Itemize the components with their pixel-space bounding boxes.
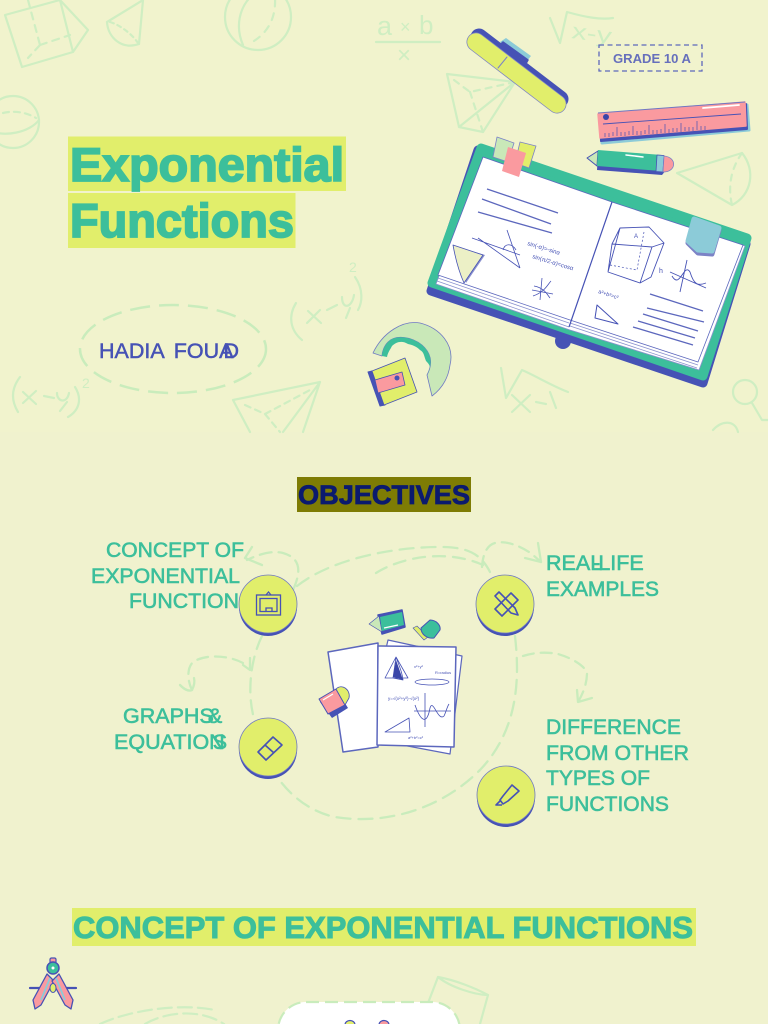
objective 3: graphs and equations	[114, 704, 297, 779]
icon: compass	[30, 958, 76, 1009]
center illustration: papers and supplies	[319, 610, 462, 754]
doodle formula labels: ×	[397, 42, 411, 69]
label: REAL-LIFE	[546, 551, 644, 575]
doodle formula labels: x-y	[570, 18, 613, 49]
badge	[239, 718, 297, 779]
label: CONCEPT OF	[106, 538, 244, 562]
doodle formula labels: b	[419, 10, 433, 40]
illustration: open book	[431, 137, 747, 383]
title: Functions	[70, 194, 294, 247]
dashed connectors	[180, 542, 592, 819]
doodle formula labels: 2	[82, 375, 90, 391]
title: Exponential	[70, 138, 344, 191]
triangle sketch: a²+b²=c²	[408, 735, 424, 740]
icon: marker	[476, 37, 560, 104]
icon: pencil	[587, 150, 674, 175]
front sheet	[377, 646, 456, 747]
label: EQUATIONS	[114, 730, 227, 754]
label: FUNCTIONS	[546, 792, 669, 816]
text lines	[478, 189, 704, 345]
triangle sketch	[385, 718, 424, 740]
icon: highlighter	[496, 785, 519, 805]
doodle formula labels: ×	[400, 17, 411, 37]
label: GRAPHS&	[123, 704, 222, 728]
label	[546, 715, 689, 816]
icon: eraser	[258, 737, 282, 760]
label: EXPONENTIAL	[91, 564, 240, 588]
prism sketch: a²+b²=c²	[597, 289, 619, 301]
objective 4: difference from other types of functions	[477, 715, 689, 827]
label	[114, 704, 227, 754]
next panel: white card	[278, 1002, 460, 1024]
label	[546, 551, 659, 601]
label	[91, 538, 244, 613]
grade label	[599, 45, 702, 71]
prism sketch: h	[659, 268, 663, 275]
doodle formula labels	[82, 10, 613, 391]
icon: ruler	[598, 102, 749, 143]
label: TYPES OF	[546, 766, 650, 790]
title	[68, 136, 346, 248]
shaving inner band	[382, 337, 431, 375]
back sheet	[365, 640, 462, 754]
geometry sketch	[472, 230, 574, 300]
cone sketch	[385, 657, 451, 701]
page stack	[436, 159, 745, 370]
grade label: GRADE 10 A	[613, 51, 692, 66]
author name badge: HADIA FOUAD	[99, 339, 239, 363]
icon: card figure tips	[345, 1020, 389, 1024]
pencil stub	[369, 610, 405, 634]
label: DIFFERENCE	[546, 715, 681, 739]
cone sketch: R=radius	[435, 670, 451, 675]
icon: blackboard	[256, 592, 280, 615]
label: FROM OTHER	[546, 741, 689, 765]
badge	[476, 575, 534, 636]
objective 2: real-life examples	[476, 551, 659, 636]
geometry sketch: sin(-α)=-sinα	[526, 241, 561, 257]
label: FUNCTION	[129, 589, 239, 613]
badge	[239, 575, 297, 636]
book cover	[431, 148, 747, 383]
sharpener body	[368, 358, 417, 406]
sine wave sketch	[414, 693, 451, 727]
prism sketch: A	[634, 234, 638, 240]
cone sketch: y=√(x²+y²)-√(x²)	[388, 696, 420, 701]
pages	[438, 157, 743, 362]
badge	[477, 766, 535, 827]
label: EXAMPLES	[546, 577, 659, 601]
icon: ruler and pencil	[495, 592, 518, 616]
objectives heading: OBJECTIVES	[298, 480, 470, 510]
prism sketch	[595, 227, 706, 324]
doodle formula labels: a	[377, 11, 393, 41]
shaving	[373, 323, 451, 396]
eraser stub	[413, 620, 440, 640]
left sheet	[328, 643, 378, 752]
section heading: concept of exponential functions: CONCEPT OF EXPONENTIAL FUNCTIONS	[73, 910, 693, 945]
page tabs	[493, 137, 536, 177]
cone sketch: x²+y²	[414, 664, 424, 669]
geometry sketch: sin(π/2-α)=cosα	[531, 254, 574, 273]
icon: pencil sharpener	[368, 323, 451, 406]
bookmark clip	[688, 219, 719, 254]
eraser	[319, 687, 349, 718]
folded corner	[453, 245, 485, 283]
doodle formula labels: 2	[349, 259, 357, 275]
objective 1: concept of exponential function	[91, 538, 297, 636]
author name badge	[80, 305, 266, 393]
